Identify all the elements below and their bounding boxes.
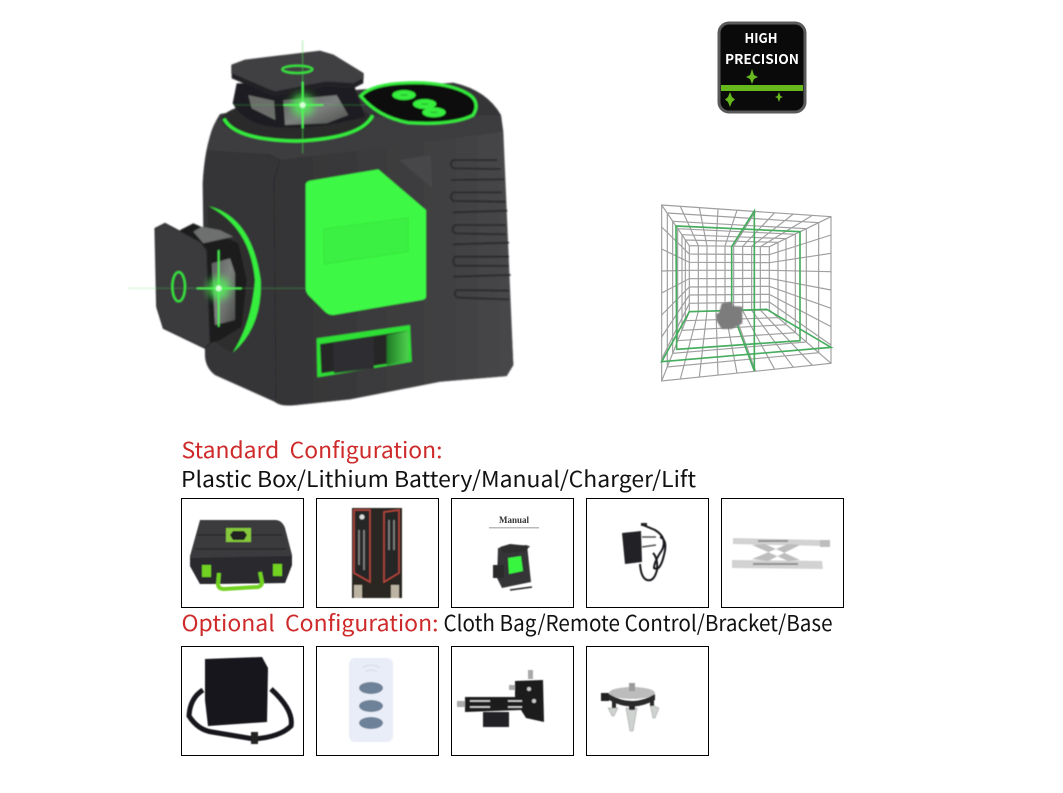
- accessory: bracket: [452, 646, 574, 756]
- grip ribs: [451, 160, 510, 299]
- triangle mark on front: [399, 155, 432, 188]
- optional configuration heading: Optional Configuration:: [182, 606, 438, 638]
- standard configuration list: Plastic Box/Lithium Battery/Manual/Charger/Lift: [181, 462, 696, 494]
- high precision badge: [719, 23, 805, 112]
- accessory: remote control: [316, 646, 438, 756]
- control panel: [361, 83, 476, 123]
- optional configuration list: Cloth Bag/Remote Control/Bracket/Base: [444, 606, 832, 638]
- laser beam cross: top: [233, 40, 367, 153]
- accessory: lift: [722, 498, 844, 608]
- accessory: charger: [586, 498, 708, 608]
- high precision badge: PRECISION: [725, 48, 799, 68]
- accessory: manual: [452, 498, 574, 608]
- power slide switch: [317, 325, 412, 377]
- standard configuration heading: Standard Configuration:: [182, 433, 442, 465]
- side rotating laser head: [155, 206, 261, 353]
- accessory: cloth bag: [182, 646, 304, 756]
- accessory: base: [586, 646, 708, 756]
- laser level in room: [716, 302, 742, 329]
- room grid diagram with laser planes: [662, 205, 831, 381]
- laser body: [203, 83, 513, 406]
- badge sparkles: [725, 69, 783, 107]
- badge green bar: [721, 85, 803, 91]
- badge heading: HIGH: [744, 27, 778, 47]
- product photo: green laser level: [128, 40, 513, 406]
- top rotating laser head: [222, 51, 373, 141]
- wall and floor grid: [662, 205, 831, 381]
- green laser planes: [662, 211, 831, 371]
- accessory: lithium battery: [316, 498, 438, 608]
- accessory: plastic box: [182, 498, 304, 608]
- green display window: [306, 169, 426, 315]
- laser beam cross: side: [128, 250, 305, 327]
- accessory: manual: Manual: [499, 515, 529, 525]
